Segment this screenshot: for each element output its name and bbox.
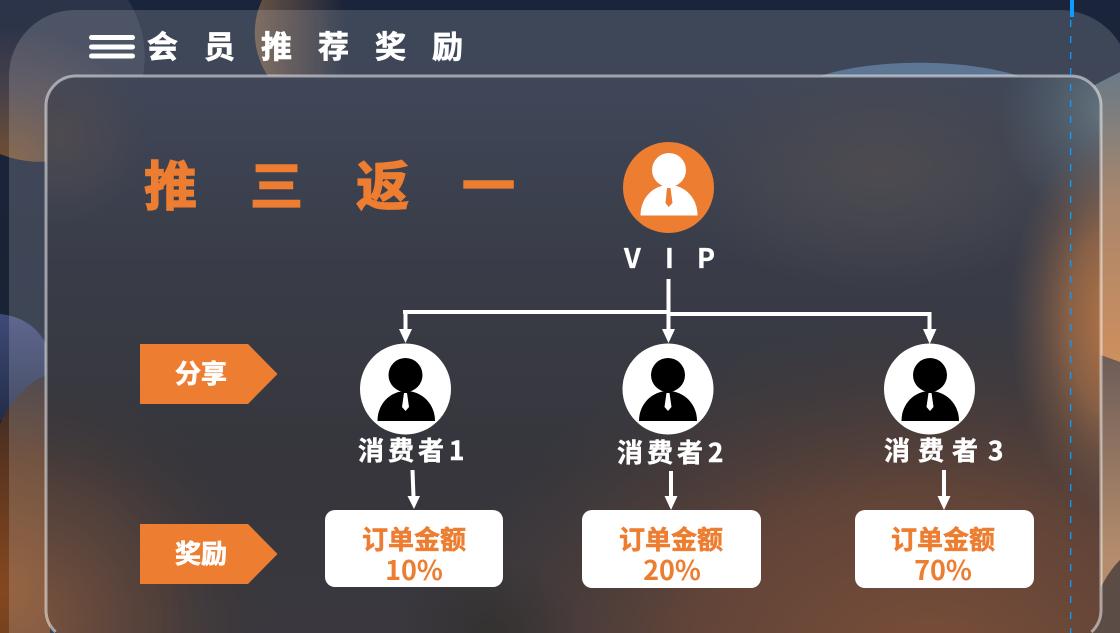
reward box 1: 订单金额 xyxy=(362,520,466,557)
reward box 2: 订单金额 xyxy=(619,520,723,557)
arrows: consumers to rewards xyxy=(408,470,950,510)
icon: menu lines xyxy=(89,35,135,58)
arrows: VIP to consumers xyxy=(399,279,936,344)
reward box 2 xyxy=(582,510,761,588)
title: 会员推荐奖励 xyxy=(147,22,463,67)
reward box 1 xyxy=(325,510,503,588)
consumer 2 xyxy=(617,344,723,470)
consumer 3 xyxy=(884,344,1003,468)
reward box 3: 订单金额 xyxy=(891,520,995,557)
consumer 1: 消费者1 xyxy=(358,431,464,468)
consumer 3: 消费者3 xyxy=(884,431,1003,468)
tag: share xyxy=(140,344,278,404)
tag: reward xyxy=(140,524,278,584)
consumer 2: 消费者2 xyxy=(617,433,723,470)
reward box 1: 10% xyxy=(385,549,443,588)
blue dashed guide line xyxy=(1070,0,1074,633)
reward box 3: 70% xyxy=(914,549,972,588)
icon: VIP avatar xyxy=(623,142,714,233)
label: VIP: VIP xyxy=(623,237,715,276)
heading: promo rule: 推三返一 xyxy=(144,145,515,221)
reward box 3 xyxy=(855,510,1034,588)
tag: share: 分享 xyxy=(175,354,227,391)
tag: reward: 奖励 xyxy=(175,534,227,571)
consumer 1 xyxy=(358,344,464,468)
reward box 2: 20% xyxy=(643,549,701,588)
